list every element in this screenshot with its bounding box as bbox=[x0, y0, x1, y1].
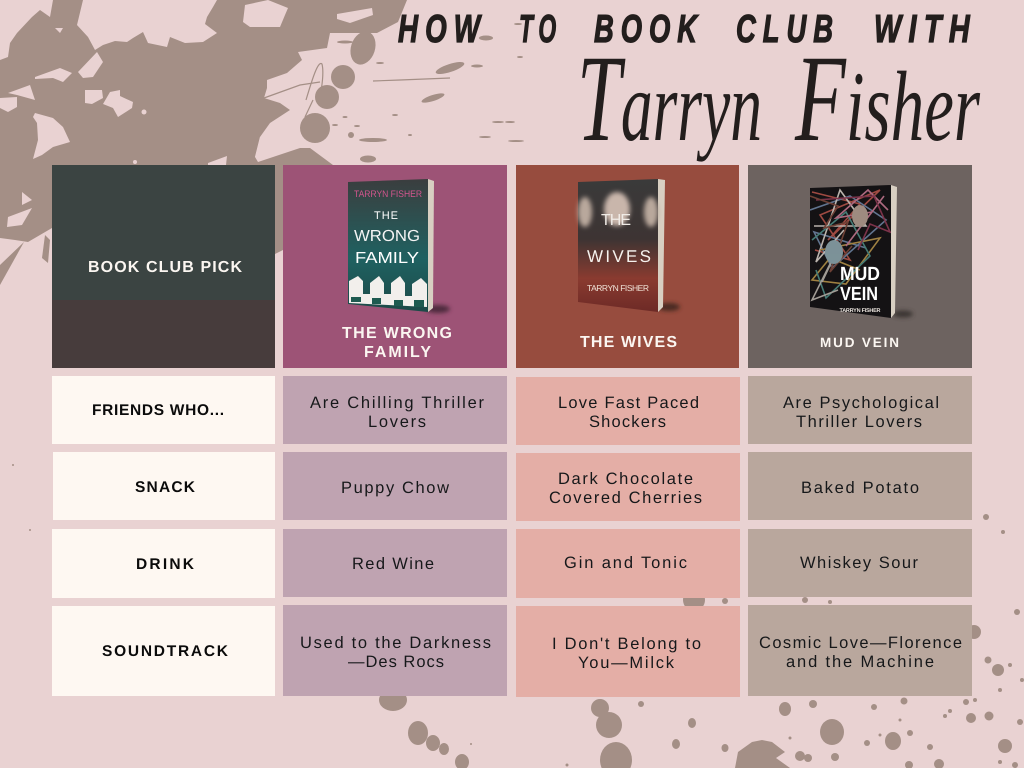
cell: —Des Rocs bbox=[348, 653, 444, 671]
row: snack bbox=[53, 452, 972, 521]
script title: tarryn fisher: Tarryn bbox=[577, 30, 762, 167]
cell bbox=[516, 377, 740, 445]
cell bbox=[283, 529, 507, 597]
cell bbox=[748, 529, 972, 597]
cell: You—Milck bbox=[578, 654, 675, 672]
book: the wrong family bbox=[348, 179, 450, 313]
row label: SOUNDTRACK bbox=[102, 643, 229, 660]
cell: Are Chilling Thriller bbox=[310, 394, 484, 412]
row label bbox=[52, 529, 275, 598]
cell: I Don't Belong to bbox=[552, 635, 701, 653]
book: mud vein: TARRYN FISHER bbox=[840, 308, 881, 314]
book: the wives: THE bbox=[601, 212, 631, 229]
cell: Baked Potato bbox=[801, 479, 919, 497]
book title label: FAMILY bbox=[364, 344, 431, 361]
book: the wives bbox=[578, 179, 680, 312]
cell: Shockers bbox=[589, 413, 666, 431]
cell: Gin and Tonic bbox=[564, 554, 687, 572]
cell: Dark Chocolate bbox=[558, 470, 693, 488]
row label bbox=[53, 452, 275, 520]
book: the wrong family: TARRYN FISHER bbox=[354, 189, 422, 200]
headline: how to book club with: HOW bbox=[398, 8, 487, 51]
cell: Covered Cherries bbox=[549, 489, 702, 507]
cell bbox=[748, 376, 972, 444]
panel: row labels column header bbox=[52, 165, 275, 368]
cell: and the Machine bbox=[786, 653, 934, 671]
row label: FRIENDS WHO... bbox=[92, 402, 224, 419]
book: the wrong family: FAMILY bbox=[355, 250, 419, 267]
book: mud vein: MUD bbox=[840, 264, 880, 285]
cell bbox=[748, 605, 972, 696]
cell bbox=[516, 529, 740, 598]
cell bbox=[516, 606, 740, 697]
cell bbox=[283, 605, 507, 696]
book title label: THE WIVES bbox=[580, 334, 677, 351]
script title: tarryn fisher bbox=[577, 30, 981, 167]
cell: Love Fast Paced bbox=[558, 394, 699, 412]
book title label bbox=[342, 325, 452, 361]
panel: mud vein bbox=[748, 165, 972, 368]
cell: Whiskey Sour bbox=[800, 554, 918, 572]
headline: how to book club with: TO bbox=[519, 8, 562, 51]
cell bbox=[283, 376, 507, 444]
cell: Red Wine bbox=[352, 555, 434, 573]
splatter highlights: background gaps in the paint bbox=[0, 0, 373, 227]
book title label: MUD VEIN bbox=[820, 335, 899, 350]
panel: the wives bbox=[516, 165, 739, 368]
panel: the wrong family bbox=[283, 165, 507, 368]
cell: Are Psychological bbox=[783, 394, 939, 412]
row label bbox=[52, 376, 275, 444]
row: soundtrack bbox=[52, 605, 972, 697]
cell bbox=[516, 453, 740, 521]
book: the wrong family: WRONG bbox=[354, 228, 420, 245]
book: the wives: WIVES bbox=[587, 247, 651, 266]
row: drink bbox=[52, 529, 972, 598]
row: friends who bbox=[52, 376, 972, 445]
cell bbox=[283, 452, 507, 520]
cell bbox=[748, 452, 972, 520]
row label bbox=[52, 606, 275, 696]
headline: how to book club with: WITH bbox=[874, 8, 977, 51]
headline: how to book club with: BOOK bbox=[594, 8, 704, 51]
cell: Lovers bbox=[368, 413, 426, 431]
headline: how to book club with: CLUB bbox=[736, 8, 840, 51]
title bbox=[398, 8, 977, 51]
row label: SNACK bbox=[135, 479, 196, 496]
book title label: THE WRONG bbox=[342, 325, 452, 342]
row label: DRINK bbox=[136, 556, 195, 573]
cell: Cosmic Love—Florence bbox=[759, 634, 962, 652]
headline: how to book club with bbox=[398, 8, 977, 51]
book: mud vein bbox=[810, 185, 913, 318]
book: the wives: TARRYN FISHER bbox=[587, 283, 649, 293]
cell: Used to the Darkness bbox=[300, 634, 491, 652]
cell: Thriller Lovers bbox=[796, 413, 922, 431]
cell: Puppy Chow bbox=[341, 479, 449, 497]
panel: row labels column header: BOOK CLUB PICK bbox=[88, 259, 242, 276]
book: mud vein: VEIN bbox=[840, 284, 878, 305]
book: the wrong family: THE bbox=[374, 210, 398, 222]
